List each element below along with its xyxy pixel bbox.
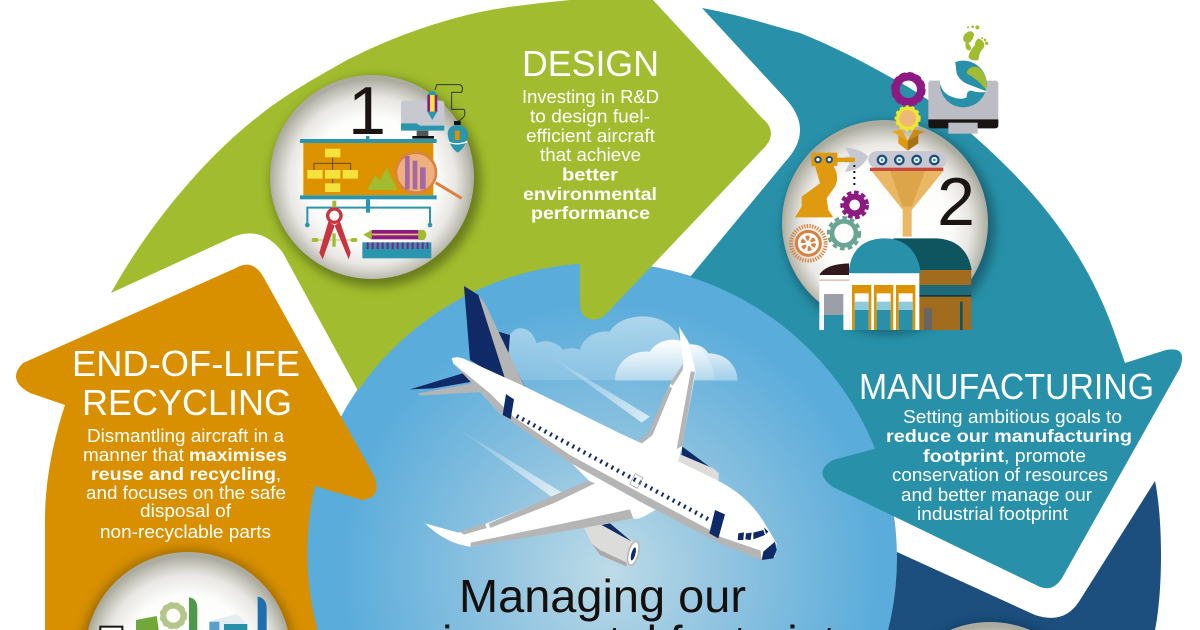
text block: design description: better bbox=[562, 164, 618, 184]
text block: manufacturing description: industrial footprint bbox=[917, 504, 1068, 524]
icon: recycling parts bbox=[100, 597, 267, 630]
text block: manufacturing description: Setting ambitious goals to bbox=[903, 407, 1122, 427]
text block: manufacturing description bbox=[886, 407, 1132, 524]
text block: recycling description: manner that bbox=[83, 445, 184, 465]
text block: manufacturing description: reduce our manufacturing bbox=[886, 426, 1132, 446]
panel: manufacturing arrow bbox=[690, 8, 1182, 588]
text block: design description: performance bbox=[531, 203, 650, 223]
aeroplane with clouds and contrails bbox=[410, 286, 777, 567]
text block: design description: that achieve bbox=[540, 145, 641, 165]
text block: recycling description: disposal of bbox=[140, 501, 232, 521]
text block: recycling description: reuse and recycling bbox=[91, 464, 276, 484]
text block: manufacturing description: and better manage our bbox=[901, 485, 1092, 505]
contrails bbox=[459, 355, 650, 499]
tail fin and stabiliser bbox=[410, 286, 525, 396]
sphere 4: in-use stage, top edge bbox=[885, 621, 1101, 630]
text block: recycling description: non-recyclable parts bbox=[100, 522, 271, 542]
lower engine and wing bbox=[425, 458, 667, 567]
upper wing and engine bbox=[633, 327, 719, 483]
heading: end-of-life recycling bbox=[72, 343, 300, 423]
sphere 2: manufacturing icons bbox=[782, 25, 998, 334]
clouds bbox=[500, 316, 738, 381]
sphere 1: design icons bbox=[270, 73, 481, 287]
heading: manufacturing: MANUFACTURING bbox=[859, 366, 1154, 407]
text block: manufacturing description: conservation of resources bbox=[892, 465, 1108, 485]
text block: recycling description: maximises bbox=[189, 445, 287, 465]
text block: recycling description bbox=[83, 426, 287, 542]
text block: design description: Investing in R&D bbox=[522, 87, 659, 107]
number 1: 1 bbox=[348, 73, 386, 149]
title bbox=[368, 570, 836, 630]
text block: design description: environmental bbox=[523, 184, 657, 204]
text block: design description: efficient aircraft bbox=[526, 126, 655, 146]
icon: presentation board and tools bbox=[300, 85, 468, 259]
heading: end-of-life recycling: END-OF-LIFE bbox=[72, 343, 300, 384]
heading: end-of-life recycling: RECYCLING bbox=[82, 382, 292, 423]
text block: manufacturing description: , promote bbox=[1004, 446, 1086, 466]
text block: recycling description: and focuses on the safe bbox=[86, 483, 286, 503]
text block: design description bbox=[522, 87, 659, 223]
central sky circle bbox=[305, 262, 897, 630]
number 2: 2 bbox=[937, 164, 975, 240]
icon: factory, robot, funnel and footprint bbox=[791, 25, 998, 330]
panel: dark blue arrow (in use stage) bbox=[880, 481, 1161, 630]
text block: design description: to design fuel- bbox=[530, 106, 650, 126]
panel: end-of-life recycling arrow bbox=[16, 265, 377, 630]
text block: recycling description: Dismantling aircraft in a bbox=[87, 426, 285, 446]
text block: recycling description: , bbox=[276, 464, 281, 484]
sphere 3: recycling icons bbox=[80, 549, 296, 630]
text block: manufacturing description: footprint bbox=[923, 446, 1004, 466]
fuselage bbox=[452, 357, 777, 561]
panel: design arrow bbox=[111, 0, 771, 391]
heading: design: DESIGN bbox=[522, 43, 659, 84]
title: Managing our bbox=[459, 570, 746, 622]
